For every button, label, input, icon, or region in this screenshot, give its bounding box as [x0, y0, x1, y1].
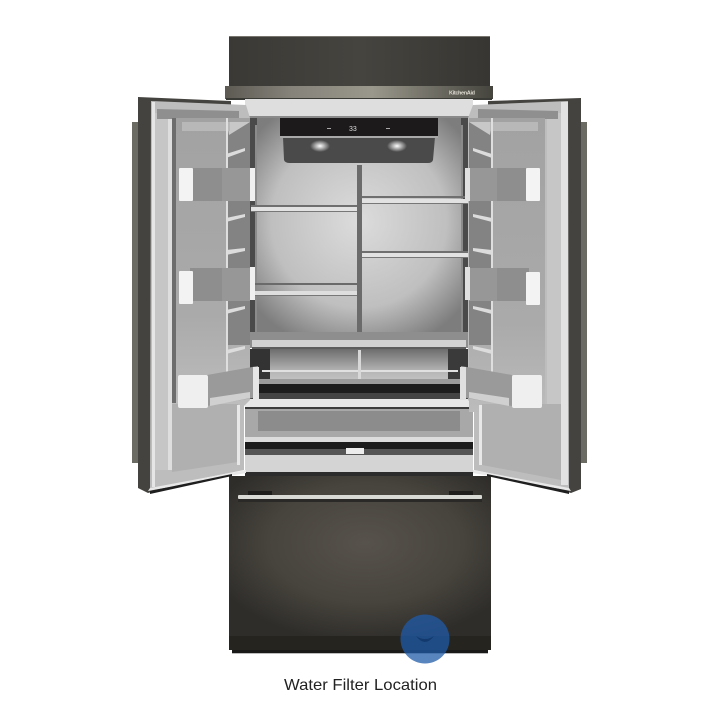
door shell: [138, 97, 231, 493]
door bin top: [179, 168, 255, 201]
lower freezer drawer: [229, 476, 491, 654]
filter cap icon: [416, 636, 434, 642]
door shell: [488, 98, 581, 493]
door bin middle: [465, 267, 540, 305]
refrigerator interior: [245, 99, 473, 476]
inner door panel: [469, 118, 545, 412]
door bin middle: [179, 267, 255, 304]
door bin bottom: [460, 366, 542, 408]
center divider rail: [357, 165, 362, 333]
door bin bottom: [178, 366, 259, 408]
door shelf clips: [473, 148, 492, 354]
brand name: KitchenAid: [449, 90, 475, 96]
glass shelves: [251, 196, 468, 296]
door shelf clips: [226, 148, 245, 354]
top cabinet panel: [229, 36, 490, 86]
outer strip: [581, 122, 587, 463]
door liner frame: [468, 101, 569, 489]
inner door panel: [172, 118, 250, 400]
door liner frame: [150, 101, 250, 489]
lights: [310, 140, 330, 152]
toe kick: [229, 636, 491, 654]
side rails: [250, 118, 468, 334]
dark gap: [250, 384, 468, 399]
outer strip: [132, 122, 138, 463]
lower pantry drawer: [245, 399, 473, 476]
drawer handle: [238, 491, 482, 502]
left door: [132, 97, 259, 494]
header trim with brand badge: [225, 86, 493, 100]
control console: [280, 118, 438, 163]
door bin top: [465, 168, 540, 201]
temperature display: 33: [349, 126, 357, 133]
caption: Water Filter Location: [284, 677, 437, 694]
right door: [460, 98, 587, 494]
upper crisper shelf and bins: [250, 332, 468, 386]
highlight: water filter location: [400, 614, 450, 664]
